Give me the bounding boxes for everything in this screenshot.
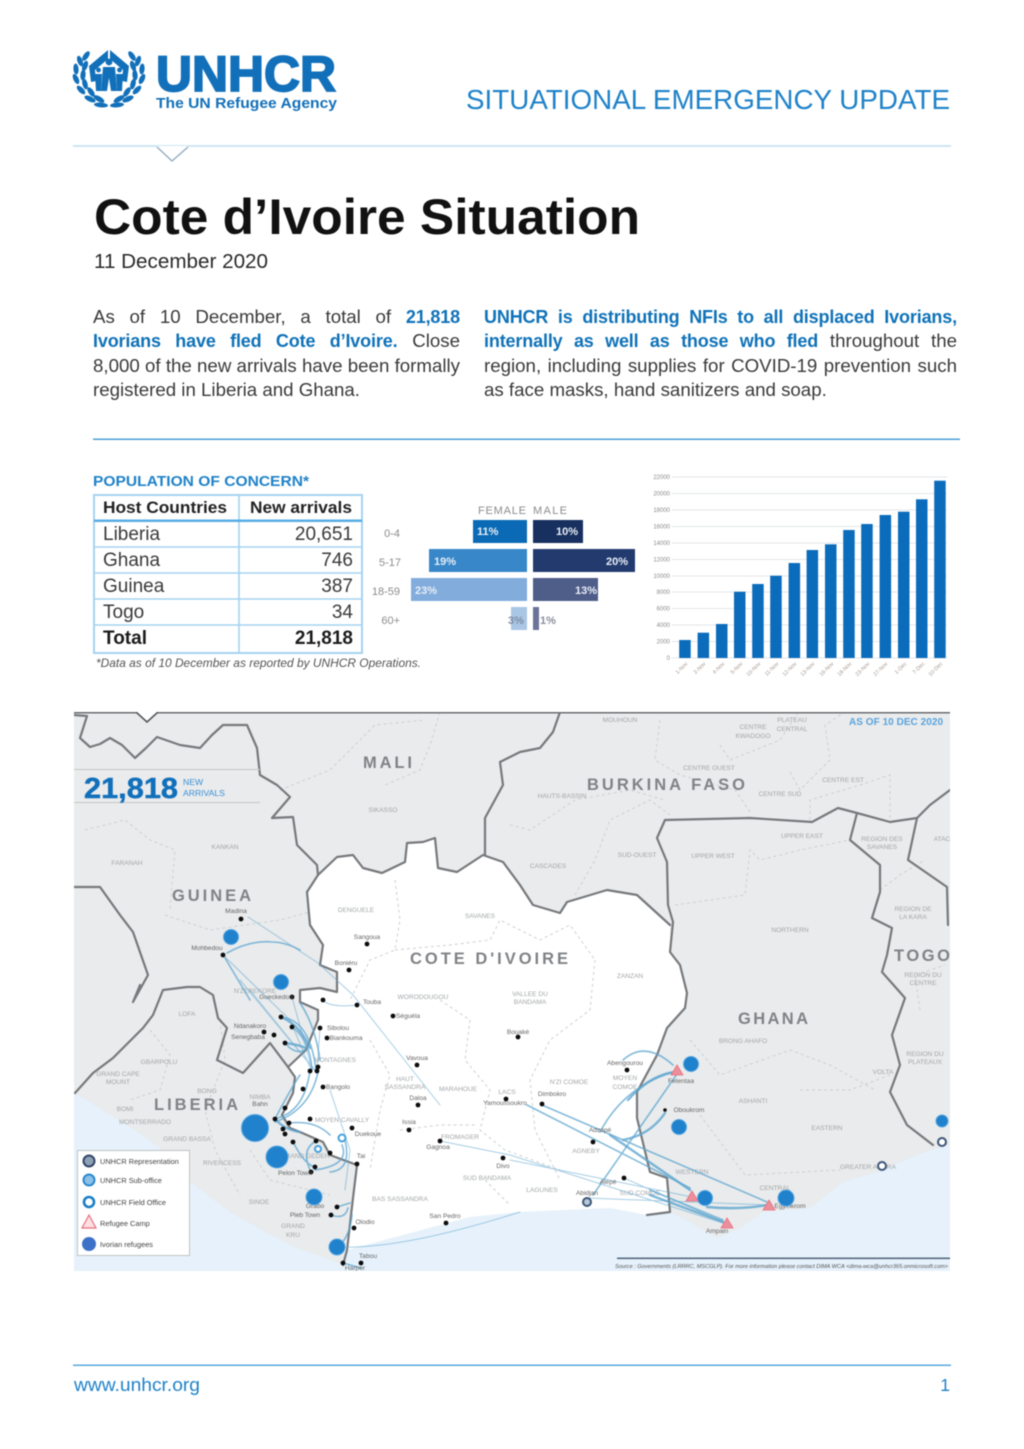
map: town labels: Pleb Town bbox=[290, 1212, 320, 1219]
map: town labels: Sibolou bbox=[327, 1025, 349, 1032]
header label: SITUATIONAL EMERGENCY UPDATE bbox=[466, 84, 950, 115]
map: international borders bbox=[74, 712, 950, 1265]
chart date labels: 23-Nov bbox=[855, 661, 872, 678]
map: region labels: SASSANDRA bbox=[385, 1084, 426, 1091]
chart date labels: 4-Nov bbox=[712, 661, 727, 676]
chart axis values: 22000 bbox=[653, 475, 671, 481]
table rows: Liberia bbox=[103, 524, 160, 545]
map: region labels: CENTRAL bbox=[760, 1185, 791, 1192]
map: region labels: NIMBA bbox=[250, 1094, 271, 1101]
map: region labels: GRAND BASSA bbox=[163, 1136, 211, 1143]
map: country labels: TOGO bbox=[894, 947, 950, 965]
map: town labels: Gagnoa bbox=[426, 1144, 450, 1151]
chart date labels: 10-Dec bbox=[928, 661, 945, 678]
table rows: Guinea bbox=[103, 576, 165, 597]
map: town labels: Tai bbox=[357, 1153, 366, 1160]
map: town labels: Touba bbox=[363, 999, 381, 1006]
map: region labels: BONG bbox=[197, 1088, 217, 1095]
map: region labels: CENTRE OUEST bbox=[683, 765, 735, 772]
map: region labels: ATAC bbox=[934, 836, 951, 843]
section divider bbox=[93, 438, 960, 440]
map: region labels: LACS bbox=[498, 1089, 516, 1096]
map: region labels: SUD COMOE bbox=[620, 1190, 661, 1197]
chart: population pyramid: 5-17 bbox=[379, 557, 401, 569]
table rows: Total bbox=[103, 628, 147, 649]
map: town labels: Abengourou bbox=[607, 1060, 643, 1067]
chart date labels: 10-Nov bbox=[746, 661, 763, 678]
chart date labels: 13-Nov bbox=[800, 661, 817, 678]
text block: arrivals summary: As of 10 December, a total of 21,818 bbox=[93, 306, 460, 327]
map: region labels: RIVERCESS bbox=[203, 1160, 242, 1167]
callout: new arrivals: ARRIVALS bbox=[183, 788, 225, 798]
map: region labels: MARAHOUE bbox=[439, 1086, 478, 1093]
map: town labels: Bahn bbox=[252, 1101, 268, 1108]
text block: arrivals summary bbox=[92, 306, 460, 401]
chart axis values bbox=[653, 475, 671, 662]
map: region labels: REGION DU bbox=[904, 972, 942, 979]
map: region labels: FROMAGER bbox=[441, 1134, 479, 1141]
map source: Source : Governments (LRRRC, MSCGLP). For more information please contact DIMA WCA <dima-wca@unhcr365.onmicrosoft.com> bbox=[615, 1264, 948, 1270]
chart: population pyramid: 11% bbox=[477, 526, 499, 538]
map: region labels: BANDAMA bbox=[514, 999, 547, 1006]
map: region labels: LOFA bbox=[179, 1011, 196, 1018]
map: country labels: GHANA bbox=[738, 1010, 808, 1028]
map: region labels: SAVANES bbox=[465, 913, 496, 920]
page number: 1 bbox=[940, 1375, 950, 1395]
chart axis values: 18000 bbox=[653, 508, 671, 514]
text block: arrivals summary: registered in Liberia and Ghana. bbox=[93, 379, 360, 400]
map: town labels: Ampain bbox=[706, 1228, 729, 1235]
chart date labels: 16-Nov bbox=[819, 661, 836, 678]
map: region labels: SUD-OUEST bbox=[618, 852, 656, 859]
map: region labels: CENTRE bbox=[739, 724, 767, 731]
map: town labels: Biankouma bbox=[330, 1035, 363, 1042]
map: town labels: Bangolo bbox=[326, 1084, 350, 1091]
table rows: 387 bbox=[321, 576, 353, 597]
map: town labels: Oboukrom bbox=[674, 1107, 705, 1114]
table header: Host Countries bbox=[103, 499, 227, 517]
map: town labels: Boniéru bbox=[335, 960, 358, 967]
map: region labels: CENTRE SUD bbox=[759, 791, 802, 798]
map: region labels: MONTSERRADO bbox=[119, 1119, 171, 1126]
map legend: Ivorian refugees bbox=[100, 1240, 153, 1249]
map: region labels: VALLEE DU bbox=[512, 991, 548, 998]
map: town labels: Senegbaba bbox=[231, 1034, 265, 1041]
map: region labels: ZANZAN bbox=[617, 973, 643, 980]
map: region labels: KWADOGO bbox=[736, 733, 770, 740]
map: region labels: NORTHERN bbox=[771, 927, 809, 934]
map: town labels: San Pedro bbox=[429, 1213, 461, 1220]
map: region labels: HAUTS-BASSIN bbox=[538, 793, 587, 800]
table rows bbox=[103, 524, 353, 649]
map legend: UNHCR Sub-office bbox=[100, 1176, 162, 1185]
chart date labels: 27-Nov bbox=[873, 661, 890, 678]
chart: population pyramid: 23% bbox=[415, 585, 437, 597]
map: region labels: N'ZI COMOE bbox=[550, 1079, 589, 1086]
title: Cote d’Ivoire Situation bbox=[94, 189, 640, 245]
chart axis values: 20000 bbox=[653, 492, 671, 498]
chart: population pyramid: 20% bbox=[606, 556, 628, 568]
chart axis values: 4000 bbox=[657, 623, 671, 629]
chart: population pyramid bbox=[372, 505, 635, 630]
map: town labels: Yamoussoukro bbox=[483, 1100, 527, 1107]
map: region labels: DENGUELE bbox=[338, 907, 375, 914]
map: region labels: BOMI bbox=[117, 1106, 134, 1113]
table header: New arrivals bbox=[250, 499, 352, 517]
chart date labels: 7-Dec bbox=[912, 661, 927, 676]
map: region labels: MONTAGNES bbox=[314, 1057, 357, 1064]
map: region labels: MOUNT bbox=[106, 1079, 130, 1086]
text block: distribution summary bbox=[484, 307, 957, 401]
icon: UNHCR emblem bbox=[71, 50, 147, 108]
map: towns bbox=[221, 917, 667, 1265]
callout: new arrivals bbox=[74, 770, 260, 805]
heading: population of concern: POPULATION OF CONCERN* bbox=[93, 474, 309, 490]
map: sea bbox=[74, 1093, 950, 1271]
map: town labels: Mohbedou bbox=[191, 945, 223, 952]
map: town labels: Harper bbox=[345, 1265, 366, 1272]
chart: population pyramid: 13% bbox=[575, 585, 597, 597]
map: region labels: REGION DE bbox=[894, 906, 932, 913]
map: region labels: REGION DU bbox=[906, 1051, 944, 1058]
map: town labels: Adzopé bbox=[589, 1127, 612, 1134]
map: town labels: Séguéla bbox=[396, 1013, 420, 1020]
map: region labels: AGNEBY bbox=[572, 1148, 600, 1155]
map: region labels: UPPER EAST bbox=[781, 833, 823, 840]
chart axis values: 2000 bbox=[657, 640, 671, 646]
text block: distribution summary: internally as well as those who fled throughout the bbox=[484, 330, 957, 351]
map: region labels: SUD BANDAMA bbox=[463, 1175, 512, 1182]
map: town labels: Fetentaa bbox=[668, 1078, 694, 1085]
map: region labels: LAGUNES bbox=[526, 1187, 558, 1194]
map: town labels: Abidjan bbox=[576, 1190, 598, 1197]
map date: AS OF 10 DEC 2020 bbox=[849, 717, 943, 728]
map: region labels: BRONG AHAFO bbox=[719, 1038, 767, 1045]
map: town labels: Dimbokro bbox=[538, 1091, 566, 1098]
map: region labels: GRAND bbox=[281, 1223, 305, 1230]
map: region labels: WORODOUGOU bbox=[398, 994, 449, 1001]
map: region labels: MOYEN CAVALLY bbox=[315, 1117, 370, 1124]
logo wordmark: UNHCR bbox=[156, 46, 336, 102]
map: region labels: GREATER ACCRA bbox=[840, 1164, 897, 1171]
table rows: Ghana bbox=[103, 550, 160, 571]
chart axis values: 6000 bbox=[657, 606, 671, 612]
map: region labels: WESTERN bbox=[676, 1169, 709, 1176]
footer rule bbox=[73, 1364, 951, 1366]
map: region labels: BAS SASSANDRA bbox=[372, 1196, 428, 1203]
map: town labels: Gueckedou bbox=[259, 994, 293, 1001]
map: town labels: Madina bbox=[225, 908, 247, 915]
map: region labels bbox=[96, 717, 951, 1239]
map: region labels: FARANAH bbox=[111, 860, 143, 867]
date: 11 December 2020 bbox=[94, 250, 268, 273]
chart: population pyramid: FEMALE bbox=[478, 505, 526, 517]
map legend: UNHCR Field Office bbox=[100, 1198, 166, 1207]
map: region labels: CENTRE EST bbox=[822, 777, 864, 784]
chart date labels bbox=[675, 661, 945, 678]
map: Cote d'Ivoire bbox=[282, 838, 687, 1265]
map: region labels: GBARPOLU bbox=[141, 1059, 178, 1066]
map: region labels: MOYEN bbox=[613, 1075, 637, 1082]
map: region labels: GRAND GEDEH bbox=[280, 1153, 330, 1160]
header rule with notch bbox=[73, 145, 951, 161]
map: region labels: CENTRAL bbox=[777, 726, 808, 733]
map: town labels: Ndanakoro bbox=[234, 1023, 266, 1030]
chart: population pyramid: 1% bbox=[540, 615, 556, 627]
chart axis values: 8000 bbox=[657, 590, 671, 596]
chart date labels: 5-Nov bbox=[730, 661, 745, 676]
map: region labels: EASTERN bbox=[811, 1125, 843, 1132]
chart: population pyramid: MALE bbox=[533, 505, 567, 517]
map: region labels: CENTRE bbox=[909, 980, 937, 987]
map: town labels: Duekoue bbox=[355, 1131, 382, 1138]
table header bbox=[103, 499, 352, 517]
table rows: 746 bbox=[321, 550, 353, 571]
chart date labels: 1-Nov bbox=[675, 661, 690, 676]
map: region labels: SINOE bbox=[249, 1199, 270, 1206]
chart date labels: 2-Nov bbox=[693, 661, 708, 676]
chart date labels: 11-Nov bbox=[764, 661, 781, 678]
text block: distribution summary: UNHCR is distributing NFIs to all displaced Ivorians, bbox=[484, 307, 957, 327]
map: region labels: GRAND CAPE bbox=[96, 1071, 140, 1078]
chart date labels: 12-Nov bbox=[782, 661, 799, 678]
map: town labels: Egyeikrom bbox=[774, 1203, 806, 1210]
chart: population pyramid: 3% bbox=[508, 615, 524, 627]
footnote: *Data as of 10 December as reported by UNHCR Operations. bbox=[96, 656, 421, 670]
map: refugee counts bbox=[224, 930, 948, 1255]
chart date labels: 18-Nov bbox=[837, 661, 854, 678]
map: town labels: Pelon Town bbox=[278, 1170, 312, 1177]
map: town labels: Vavoua bbox=[406, 1055, 428, 1062]
map: region labels: LA KARA bbox=[899, 914, 927, 921]
text block: arrivals summary: 8,000 of the new arrivals have been formally bbox=[93, 355, 460, 376]
map: region labels: PLATEAU bbox=[777, 717, 807, 724]
chart axis values: 10000 bbox=[653, 574, 671, 580]
map legend bbox=[78, 1150, 190, 1256]
chart: population pyramid: 60+ bbox=[381, 615, 400, 627]
map: region labels: KRU bbox=[286, 1232, 300, 1239]
map: country labels: MALI bbox=[363, 754, 412, 772]
map: country labels: BURKINA FASO bbox=[587, 776, 745, 794]
text block: distribution summary: as face masks, hand sanitizers and soap. bbox=[484, 379, 827, 400]
map: region labels: HAUT bbox=[396, 1076, 414, 1083]
chart: population pyramid: 0-4 bbox=[384, 528, 400, 540]
map legend: UNHCR Representation bbox=[100, 1157, 179, 1166]
map: town labels: Daloa bbox=[409, 1095, 427, 1102]
chart bars bbox=[679, 481, 946, 658]
map: region labels: MOUHOUN bbox=[603, 717, 638, 724]
table rows: 21,818 bbox=[295, 628, 353, 649]
table: host countries bbox=[94, 495, 362, 653]
map: town labels: Bouaké bbox=[507, 1029, 530, 1036]
logo: UNHCR bbox=[71, 46, 338, 112]
map: refugee flows bbox=[223, 917, 767, 1268]
map: town labels: Tabou bbox=[359, 1253, 377, 1260]
text block: distribution summary: region, including supplies for COVID-19 prevention such bbox=[484, 355, 957, 376]
chart: cumulative arrivals bbox=[653, 475, 947, 678]
map: region labels: SIKASSO bbox=[369, 807, 397, 814]
map: region labels: N'ZEREKORE bbox=[234, 988, 277, 995]
map: region labels: PLATEAUX bbox=[908, 1059, 943, 1066]
chart axis values: 0 bbox=[667, 656, 671, 662]
chart axis values: 16000 bbox=[653, 524, 671, 530]
map: region labels: REGION DES bbox=[861, 836, 903, 843]
map: town labels bbox=[191, 908, 806, 1272]
map: arrivals by location bbox=[74, 710, 951, 1272]
table rows: Togo bbox=[103, 602, 144, 623]
callout: new arrivals: NEW bbox=[183, 777, 204, 787]
map: refugee camps bbox=[671, 1065, 775, 1228]
map: town labels: Olodio bbox=[355, 1219, 375, 1226]
map: region labels: VOLTA bbox=[873, 1069, 894, 1076]
logo tagline: The UN Refugee Agency bbox=[156, 95, 338, 112]
text block: arrivals summary: Ivorians have fled Cote d’Ivoire. Close bbox=[93, 330, 460, 351]
footer url: www.unhcr.org bbox=[73, 1374, 200, 1395]
callout: new arrivals: 21,818 bbox=[84, 773, 178, 805]
chart: population pyramid: 10% bbox=[556, 526, 578, 538]
chart axis values: 14000 bbox=[653, 541, 671, 547]
chart: population pyramid: 18-59 bbox=[372, 586, 400, 598]
chart axis values: 12000 bbox=[653, 558, 671, 564]
map: region labels: SAVANES bbox=[867, 844, 898, 851]
map: region labels: KANKAN bbox=[211, 844, 239, 851]
map: town labels: Divo bbox=[496, 1163, 510, 1170]
map: UNHCR offices bbox=[315, 1134, 946, 1206]
map: country labels: COTE D'IVOIRE bbox=[410, 950, 568, 968]
map: country labels bbox=[154, 754, 950, 1114]
map: town labels: Alépé bbox=[600, 1179, 617, 1186]
table rows: 34 bbox=[332, 602, 353, 623]
map: region labels: CASCADES bbox=[530, 863, 567, 870]
map: top rule with notch bbox=[74, 711, 950, 722]
map: town labels: Sangoua bbox=[354, 934, 381, 941]
map: town labels: Issia bbox=[402, 1119, 416, 1126]
map: region labels: COMOE bbox=[613, 1084, 638, 1091]
chart date labels: 1-Dec bbox=[894, 661, 909, 676]
chart: population pyramid: 19% bbox=[434, 556, 456, 568]
chart gridlines bbox=[672, 477, 947, 658]
map: country labels: GUINEA bbox=[172, 887, 251, 905]
map: region labels: ASHANTI bbox=[739, 1098, 767, 1105]
table rows: 20,651 bbox=[295, 524, 353, 545]
map: country labels: LIBERIA bbox=[154, 1096, 238, 1114]
map: regional boundaries bbox=[85, 710, 945, 1205]
map: town labels: Grabo bbox=[306, 1203, 324, 1210]
map legend: Refugee Camp bbox=[100, 1219, 150, 1228]
map: region labels: UPPER WEST bbox=[691, 853, 735, 860]
